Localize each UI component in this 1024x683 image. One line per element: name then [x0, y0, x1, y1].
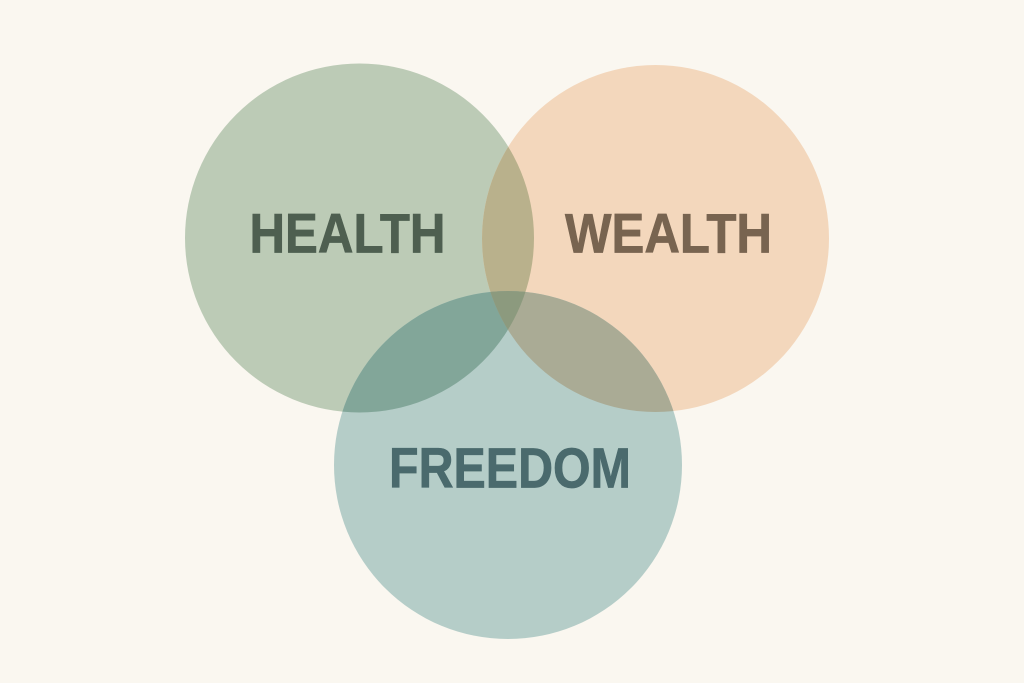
circle: wealth: [482, 65, 829, 412]
overlap: health and freedom: [342, 291, 518, 412]
circle: health: [185, 64, 534, 412]
label: freedom: FREEDOM: [389, 437, 631, 500]
label: wealth: WEALTH: [565, 203, 772, 265]
circle: freedom: [334, 291, 682, 639]
overlap: wealth and freedom: [490, 292, 674, 412]
overlap: health and wealth: [482, 146, 534, 292]
venn diagram: [185, 64, 829, 639]
overlap: all three: [490, 291, 526, 330]
label: health: HEALTH: [250, 203, 446, 265]
